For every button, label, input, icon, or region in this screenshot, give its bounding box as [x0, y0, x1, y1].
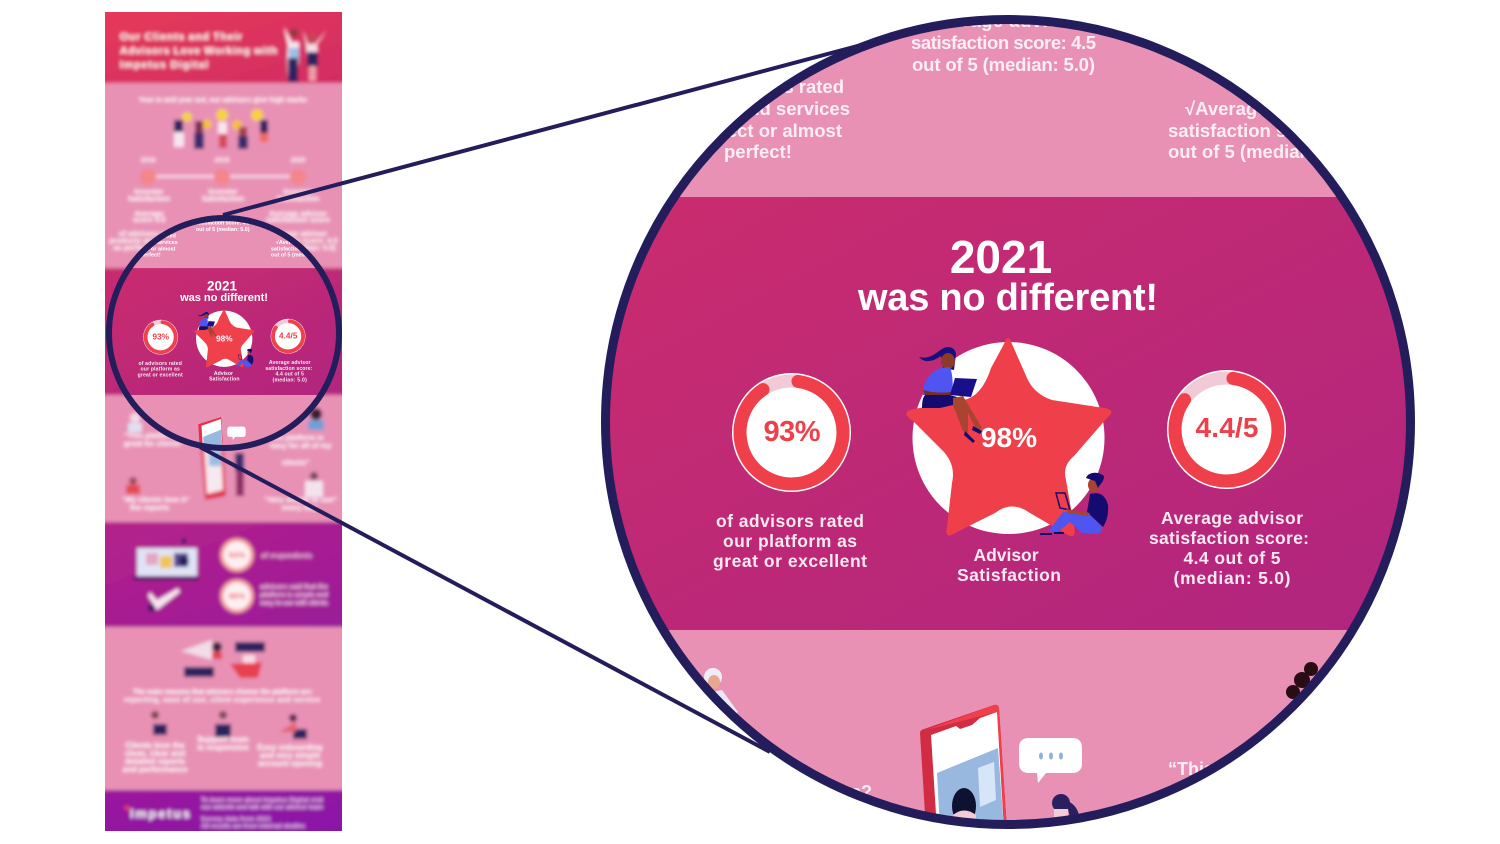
star badge: 98% advisor satisfaction: 98% — [981, 422, 1037, 453]
donut: 93% — [732, 373, 851, 492]
panel: why advisors choose us: Support team — [197, 735, 249, 744]
panel: why advisors choose us: clean, clear and — [125, 749, 185, 758]
panel: header: Impetus Digital — [120, 59, 208, 71]
small magnifier circle: Average advisor — [269, 360, 310, 366]
text: center column stat: satisfaction score: 4.5 — [911, 32, 1096, 53]
panel: why advisors choose us: reporting, ease of use, client experience and service — [124, 697, 320, 704]
panel: purple stats: 94% — [228, 550, 246, 560]
panel: investor results: Investor — [208, 187, 238, 196]
icon: phone with video call — [920, 705, 1007, 830]
small magnifier ring — [109, 218, 339, 448]
caption: 4.4 out of 5 — [1149, 508, 1309, 588]
small magnifier circle: out of 5 (median: 5.0) — [271, 253, 325, 259]
small magnifier circle: 93% — [152, 332, 170, 342]
small magnifier circle: products and services — [120, 240, 178, 246]
panel: investor results: 2018 — [141, 157, 156, 164]
panel: footer: our website and talk with our advisor team — [201, 804, 323, 811]
panel: footer: Survey data from 2021 — [201, 816, 271, 823]
panel: testimonials: “This platform is — [124, 431, 184, 440]
panel: lower pink background — [668, 630, 1348, 820]
panel: investor results — [90, 83, 357, 268]
small magnifier circle: √Average advisor — [276, 239, 322, 246]
connector line: upper — [223, 40, 880, 215]
panel: footer — [105, 787, 342, 831]
connector line: lower — [200, 447, 770, 752]
blurred infographic strip — [105, 12, 342, 831]
text: left column stat: products and services — [654, 98, 850, 119]
donut: 4.4 out of 5: 4.4/5 — [1196, 412, 1258, 443]
small magnifier circle: satisfaction score: 4.5 — [196, 221, 250, 227]
caption: advisor satisfaction — [958, 548, 1060, 581]
panel: footer: To learn more about Impetus Digital visit — [201, 797, 324, 804]
small magnifier circle: of clients rated — [138, 234, 176, 240]
panel: 2021 magenta band — [600, 197, 1420, 630]
panel: upper pink background — [680, 24, 1336, 197]
panel: investor results: Satisfaction — [202, 194, 245, 203]
panel: investor results: Average — [134, 209, 164, 218]
panel: purple stats: advisors said that the — [260, 584, 328, 591]
icon: white-haired advisor — [704, 668, 738, 714]
caption: advisor satisfaction: Advisor — [974, 545, 1039, 565]
panel: why advisors choose us: Easy onboarding — [258, 743, 323, 752]
icon: dark-haired person — [1286, 662, 1318, 699]
panel: why advisors choose us: and very simple — [260, 751, 321, 760]
panel: investor results: of advisors rated — [119, 229, 180, 238]
panel: investor results: Average advisor — [269, 209, 327, 218]
text: quote fragments — [854, 762, 1210, 794]
panel: investor results: 2019 — [215, 157, 230, 164]
panel: why advisors choose us: The main reasons that advisors choose the platform are: — [133, 689, 313, 696]
panel: testimonials: “This platform is — [264, 433, 324, 442]
small magnifier circle: Satisfaction — [209, 377, 240, 383]
small magnifier circle: was no different! — [179, 292, 268, 304]
text: left column stat: as perfect or almost — [666, 120, 842, 141]
panel: investor results: Average advisor — [269, 229, 327, 238]
panel: header: Advisors Love Working with — [120, 45, 277, 57]
small magnifier circle: 4.4/5 — [279, 331, 298, 340]
heading: 2021 — [950, 231, 1052, 283]
panel: purple stats: 96% — [228, 591, 246, 601]
star badge: 98% advisor satisfaction — [906, 338, 1111, 536]
icon: man with laptop — [1040, 473, 1108, 535]
panel: footer: All results are from internal studies — [201, 823, 305, 830]
small magnifier circle: out of 5 (median: 5.0) — [196, 227, 250, 233]
text: center column stat: Average advisor — [928, 10, 1078, 31]
caption: 93%: great or excellent — [713, 551, 867, 571]
panel: investor results: Year in and year out, our advisors give high marks — [139, 97, 307, 104]
panel: header — [105, 12, 342, 86]
panel: 2021 band underlay — [90, 268, 357, 395]
heading: was no different! — [857, 277, 1158, 319]
panel: investor results: 2020 — [291, 157, 306, 164]
text: center column stat: out of 5 (median: 5.0) — [912, 54, 1095, 75]
caption: 4.4 out of 5: satisfaction score: — [1149, 528, 1309, 548]
small magnifier circle: as perfect or almost — [124, 247, 176, 253]
small magnifier circle: our platform as — [141, 367, 180, 373]
panel: purple stats — [90, 522, 357, 627]
icon: person standing by phone — [1052, 794, 1078, 818]
panel: investor results: Investor — [283, 187, 313, 196]
panel: purple stats: platform is simple and — [260, 592, 328, 599]
panel: investor results: satisfaction score — [266, 215, 330, 224]
small magnifier circle: great or excellent — [138, 373, 183, 379]
panel: investor results: Investor — [134, 187, 164, 196]
donut: 4.4 out of 5 — [1167, 370, 1286, 489]
panel: why advisors choose us: Clients love the — [125, 741, 185, 750]
text: right column stat: out of 5 (median: 5.0) — [1168, 141, 1354, 162]
caption: 4.4 out of 5: Average advisor — [1161, 508, 1303, 528]
text: left column stat — [725, 80, 850, 162]
panel: header: Our Clients and Their — [120, 31, 242, 43]
small magnifier circle: 2021 — [207, 278, 237, 293]
text: quote fragments: “This platform — [1168, 759, 1291, 779]
small magnifier circle: perfect! — [141, 253, 161, 259]
text: left column stat: of clients rated — [712, 76, 844, 97]
panel: testimonials: “My clients love it” — [122, 495, 190, 504]
text: right column stat — [1168, 100, 1304, 162]
panel: purple stats: of respondents — [261, 553, 312, 560]
donut: 93%: 93% — [764, 416, 821, 448]
small magnifier circle: (median: 5.0) — [273, 378, 307, 384]
text: center column stat — [912, 24, 1096, 75]
small magnifier circle — [129, 221, 319, 445]
panel: why advisors choose us: is responsive — [197, 743, 249, 752]
big magnifier ring — [606, 20, 1410, 824]
caption: 93% — [713, 511, 867, 571]
caption: 93%: our platform as — [723, 531, 857, 551]
small magnifier circle: of advisors rated — [138, 361, 182, 367]
panel: why advisors choose us: account opening — [258, 759, 322, 768]
panel: investor results: Satisfaction — [128, 194, 171, 203]
panel: why advisors choose us — [90, 627, 357, 790]
heading — [858, 240, 1154, 310]
big magnifier circle — [600, 0, 1420, 844]
panel: why advisors choose us: and performance — [123, 765, 188, 774]
panel: testimonials: great for clients” — [124, 439, 184, 448]
panel: testimonials — [90, 395, 357, 522]
panel: investor results: products and services — [109, 236, 189, 245]
panel: investor results: Satisfaction — [277, 194, 320, 203]
small magnifier circle: Advisor — [214, 371, 233, 377]
text: quote fragments: care? — [824, 782, 872, 802]
small magnifier circle: satisfaction score: — [265, 366, 313, 372]
small magnifier circle: 98% — [216, 334, 233, 343]
text: right column stat: satisfaction score: 4.5 — [1168, 120, 1362, 141]
panel: investor results: satisfaction score: 4.5 — [259, 236, 337, 245]
small magnifier circle: Average advisor — [202, 214, 244, 220]
caption: 93%: of advisors rated — [716, 511, 864, 531]
panel: investor results: score 4.5 — [133, 215, 165, 224]
caption: 4.4 out of 5: (median: 5.0) — [1174, 568, 1290, 588]
icon: woman with laptop — [919, 347, 982, 443]
panel: testimonials: every day — [282, 503, 317, 512]
small magnifier circle: 4.4 out of 5 — [275, 372, 304, 378]
text: right column stat: √Average advisor — [1185, 98, 1338, 119]
panel: testimonials: easy for all of my — [270, 441, 332, 450]
small magnifier circle: satisfaction score: 4.5 — [271, 247, 328, 253]
icon: speech bubble — [1019, 738, 1082, 783]
panel: investor results: out of 5 (median: 5.0) — [260, 243, 336, 252]
panel: testimonials: “Very simple to use” — [264, 495, 338, 504]
caption: 4.4 out of 5: 4.4 out of 5 — [1184, 548, 1281, 568]
panel: investor results: as perfect or almost — [113, 243, 185, 252]
text: left column stat: perfect! — [724, 141, 792, 162]
panel: purple stats: easy to use with clients — [260, 600, 328, 607]
caption: advisor satisfaction: Satisfaction — [957, 565, 1061, 585]
panel: why advisors choose us: detailed reports — [125, 757, 186, 766]
panel: footer: Impetus — [130, 806, 190, 821]
panel: testimonials: clients” — [282, 458, 310, 467]
panel: testimonials: the reports — [130, 503, 169, 512]
